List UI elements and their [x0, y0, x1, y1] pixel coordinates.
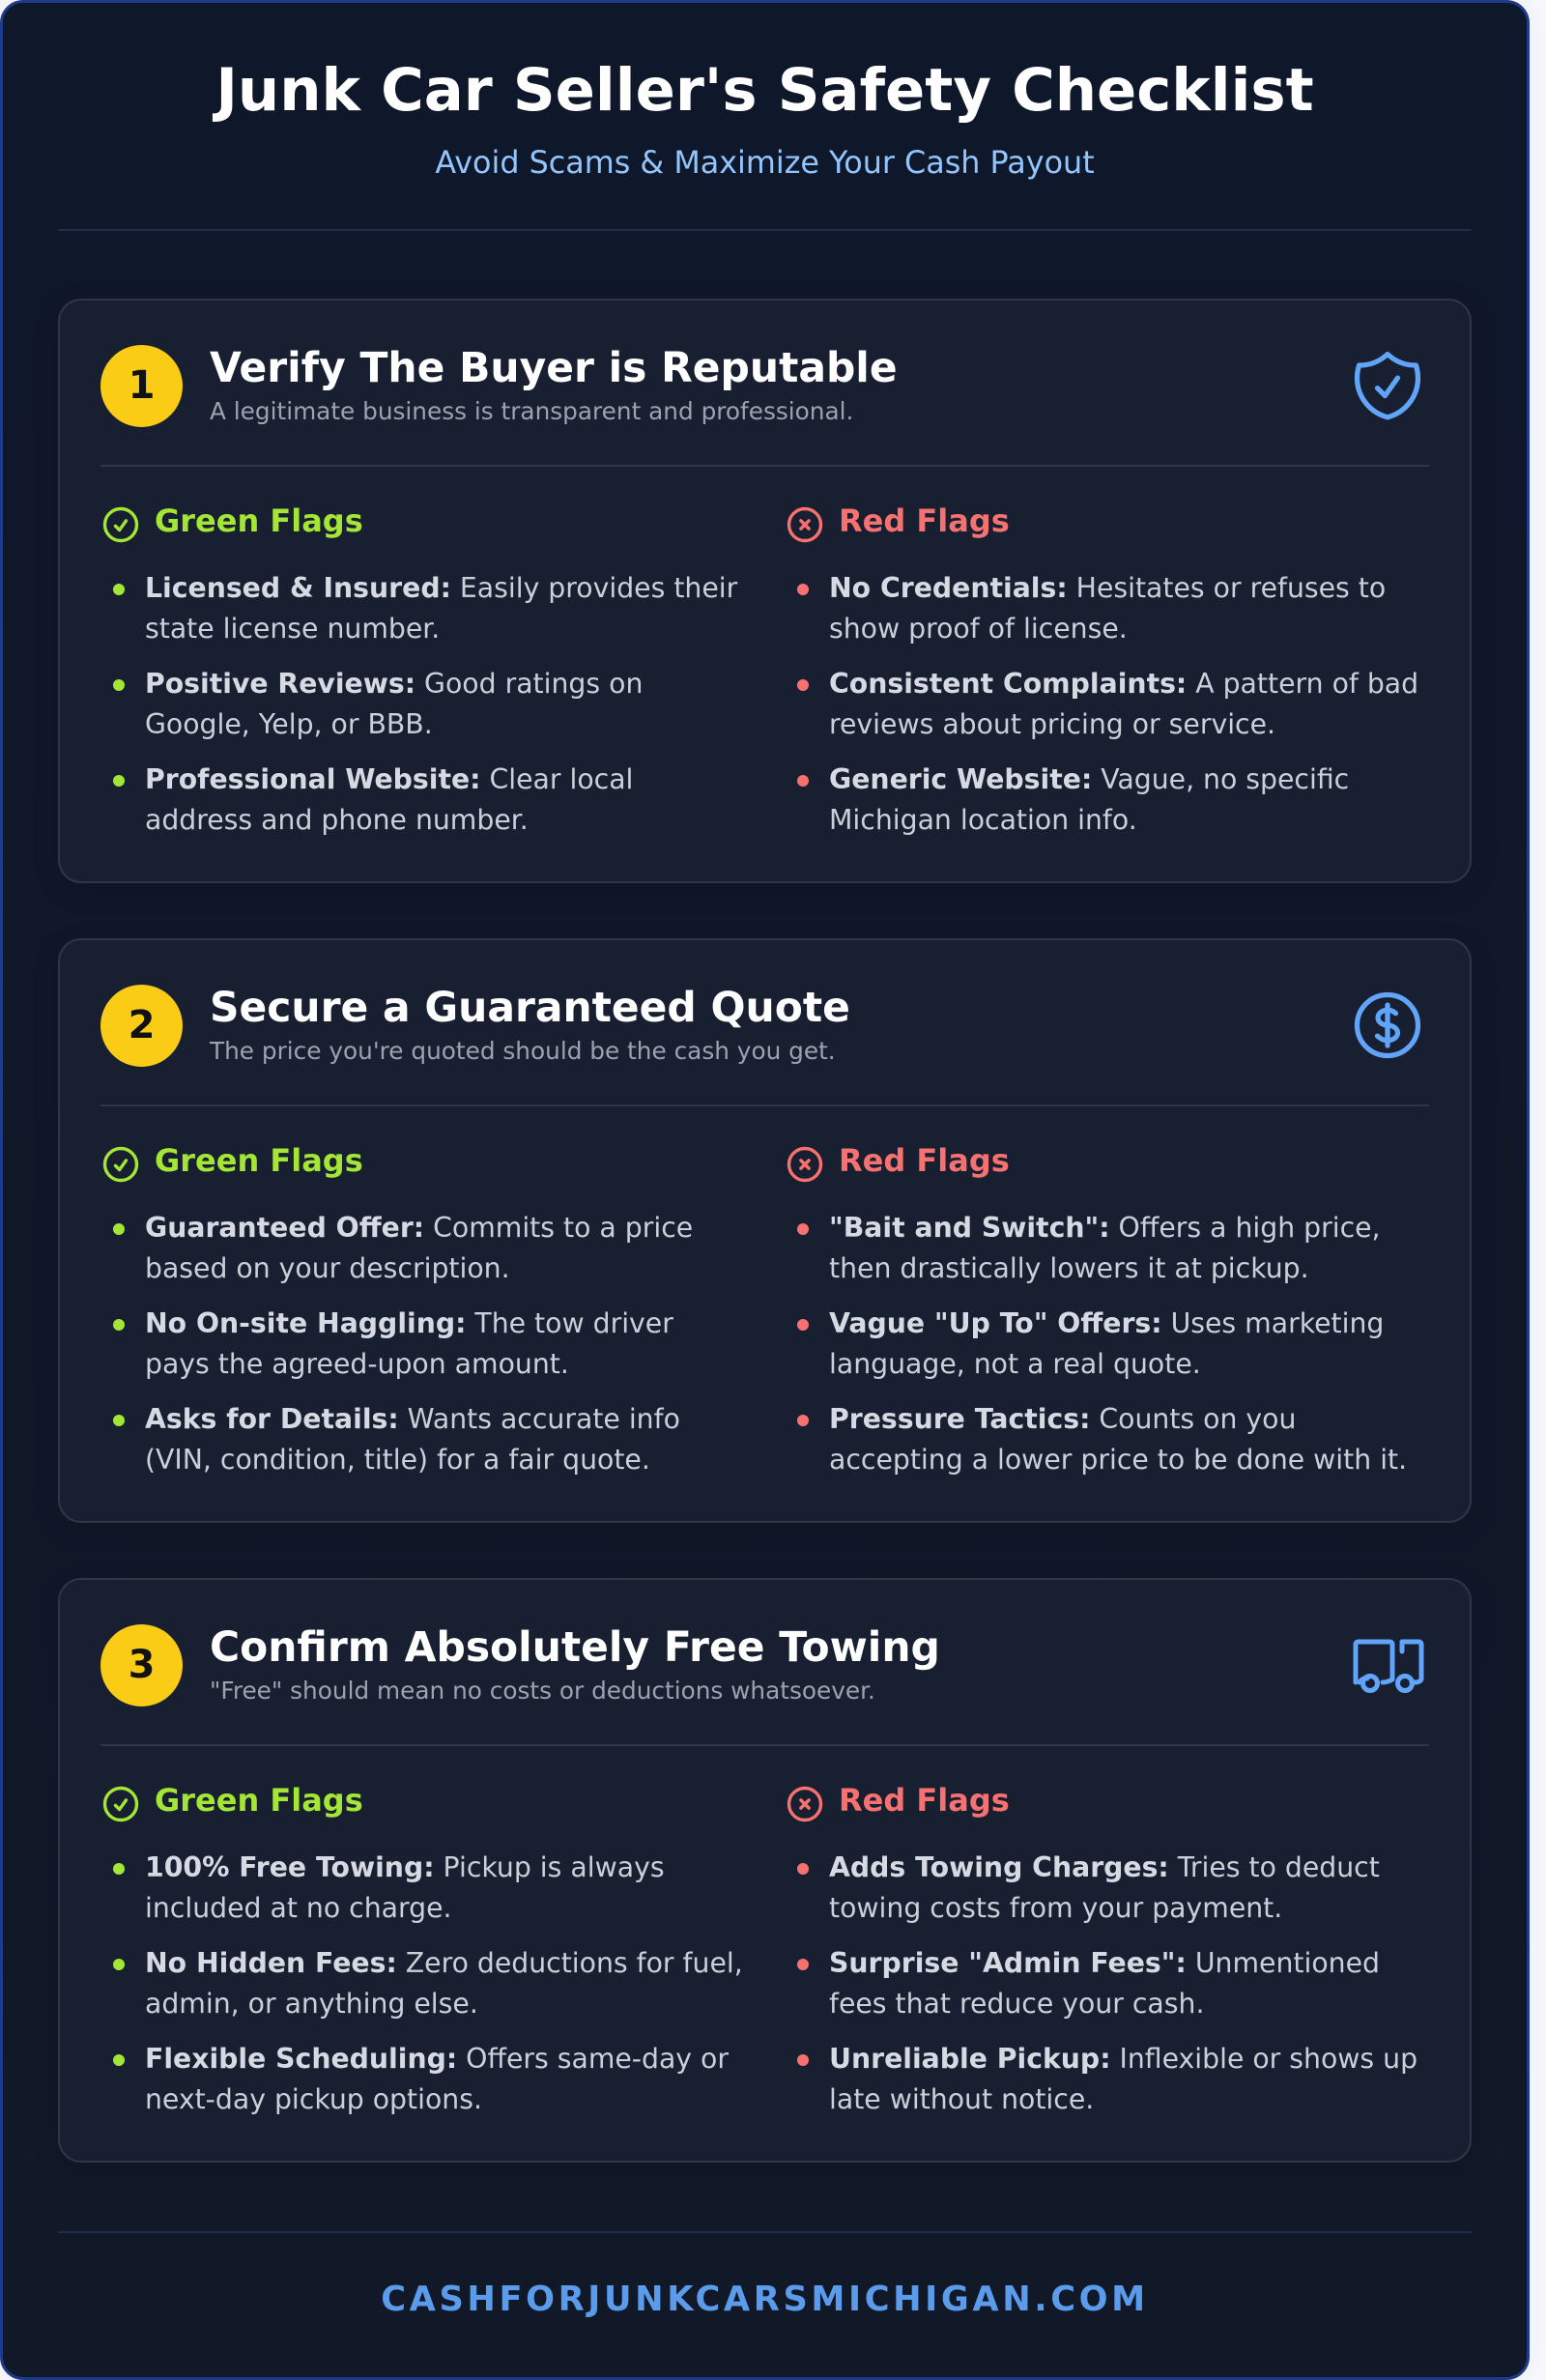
green flags heading: Green Flags	[155, 1782, 363, 1819]
icon: check circle	[102, 1146, 139, 1183]
red flags column	[787, 1142, 1407, 1476]
item: Vague "Up To" Offers: Uses marketing	[829, 1306, 1384, 1339]
step number 3	[100, 1623, 183, 1706]
item: next-day pickup options.	[145, 2083, 482, 2115]
item: No Hidden Fees: Zero deductions for fuel,	[145, 1946, 743, 1979]
item: No On-site Haggling: The tow driver	[145, 1306, 673, 1339]
item	[113, 572, 738, 645]
footer website: CASHFORJUNKCARSMICHIGAN.COM	[381, 2280, 1149, 2319]
item	[797, 1306, 1384, 1380]
green flags column	[102, 502, 738, 836]
panel heading: Secure a Guaranteed Quote	[210, 984, 850, 1030]
item: (VIN, condition, title) for a fair quote.	[145, 1444, 650, 1476]
panel: free towing	[58, 1578, 1472, 2163]
item: Pressure Tactics: Counts on you	[829, 1403, 1296, 1434]
item: accepting a lower price to be done with it.	[829, 1444, 1407, 1476]
item	[797, 1403, 1407, 1476]
item: language, not a real quote.	[829, 1348, 1201, 1380]
item: Michigan location info.	[829, 804, 1137, 836]
panel: verify the buyer	[58, 299, 1472, 883]
panel: guaranteed quote	[58, 938, 1472, 1523]
item: Positive Reviews: Good ratings on	[145, 667, 643, 700]
panel heading: Confirm Absolutely Free Towing	[210, 1623, 940, 1670]
item	[797, 763, 1349, 836]
red flags column	[787, 502, 1418, 836]
step number 2: 2	[129, 1003, 155, 1047]
panel description: "Free" should mean no costs or deductions whatsoever.	[210, 1677, 875, 1705]
item	[113, 1851, 665, 1924]
item: Licensed & Insured: Easily provides their	[145, 572, 737, 603]
item: Generic Website: Vague, no specific	[829, 763, 1349, 794]
item: Consistent Complaints: A pattern of bad	[829, 667, 1418, 700]
step number 1: 1	[129, 363, 155, 408]
item	[797, 667, 1418, 740]
panel description: A legitimate business is transparent and professional.	[210, 397, 853, 425]
icon: truck	[1353, 1639, 1424, 1693]
green flags heading: Green Flags	[155, 502, 363, 539]
icon: dollar	[1355, 991, 1420, 1059]
item	[113, 2043, 729, 2115]
item: state license number.	[145, 613, 440, 645]
item: Asks for Details: Wants accurate info	[145, 1403, 680, 1434]
icon: shield check	[1355, 352, 1420, 419]
item	[113, 1946, 743, 2020]
item: late without notice.	[829, 2083, 1094, 2115]
icon: x circle	[787, 1146, 823, 1183]
item	[797, 572, 1386, 645]
item: Guaranteed Offer: Commits to a price	[145, 1212, 693, 1243]
item: Surprise "Admin Fees": Unmentioned	[829, 1946, 1380, 1979]
icon: check circle	[102, 506, 139, 543]
red flags heading: Red Flags	[839, 1782, 1010, 1819]
step number 2	[100, 984, 183, 1067]
red flags heading: Red Flags	[839, 502, 1010, 539]
item: included at no charge.	[145, 1892, 451, 1924]
item: admin, or anything else.	[145, 1988, 478, 2020]
icon: x circle	[787, 506, 823, 543]
item: address and phone number.	[145, 804, 529, 836]
item	[113, 763, 633, 836]
panel description: The price you're quoted should be the cash you get.	[210, 1037, 836, 1065]
item: pays the agreed-upon amount.	[145, 1348, 569, 1380]
step number 3: 3	[129, 1643, 155, 1687]
red flags column	[787, 1782, 1417, 2115]
item: No Credentials: Hesitates or refuses to	[829, 572, 1386, 603]
item	[113, 1403, 680, 1476]
item: based on your description.	[145, 1252, 510, 1284]
item: Flexible Scheduling: Offers same-day or	[145, 2043, 729, 2074]
subtitle: Avoid Scams & Maximize Your Cash Payout	[435, 145, 1095, 180]
item: "Bait and Switch": Offers a high price,	[829, 1212, 1381, 1243]
icon: check circle	[102, 1786, 139, 1822]
red flags heading: Red Flags	[839, 1142, 1010, 1179]
item: towing costs from your payment.	[829, 1892, 1282, 1924]
item: Unreliable Pickup: Inflexible or shows up	[829, 2043, 1417, 2074]
item: then drastically lowers it at pickup.	[829, 1252, 1309, 1284]
item	[797, 2043, 1417, 2115]
panel heading: Verify The Buyer is Reputable	[210, 344, 898, 390]
item: fees that reduce your cash.	[829, 1988, 1204, 2020]
step number 1	[100, 344, 183, 427]
green flags column	[102, 1142, 693, 1476]
icon: x circle	[787, 1786, 823, 1822]
item	[797, 1212, 1381, 1284]
item: Professional Website: Clear local	[145, 763, 633, 794]
item: reviews about pricing or service.	[829, 708, 1275, 740]
item	[113, 667, 643, 740]
item: show proof of license.	[829, 613, 1128, 645]
green flags heading: Green Flags	[155, 1142, 363, 1179]
item	[113, 1212, 693, 1284]
item: 100% Free Towing: Pickup is always	[145, 1851, 665, 1882]
item	[797, 1851, 1380, 1924]
title: Junk Car Seller's Safety Checklist	[215, 57, 1314, 125]
item	[797, 1946, 1380, 2020]
item	[113, 1306, 673, 1380]
item: Adds Towing Charges: Tries to deduct	[829, 1851, 1380, 1882]
item: Google, Yelp, or BBB.	[145, 708, 433, 740]
green flags column	[102, 1782, 743, 2115]
